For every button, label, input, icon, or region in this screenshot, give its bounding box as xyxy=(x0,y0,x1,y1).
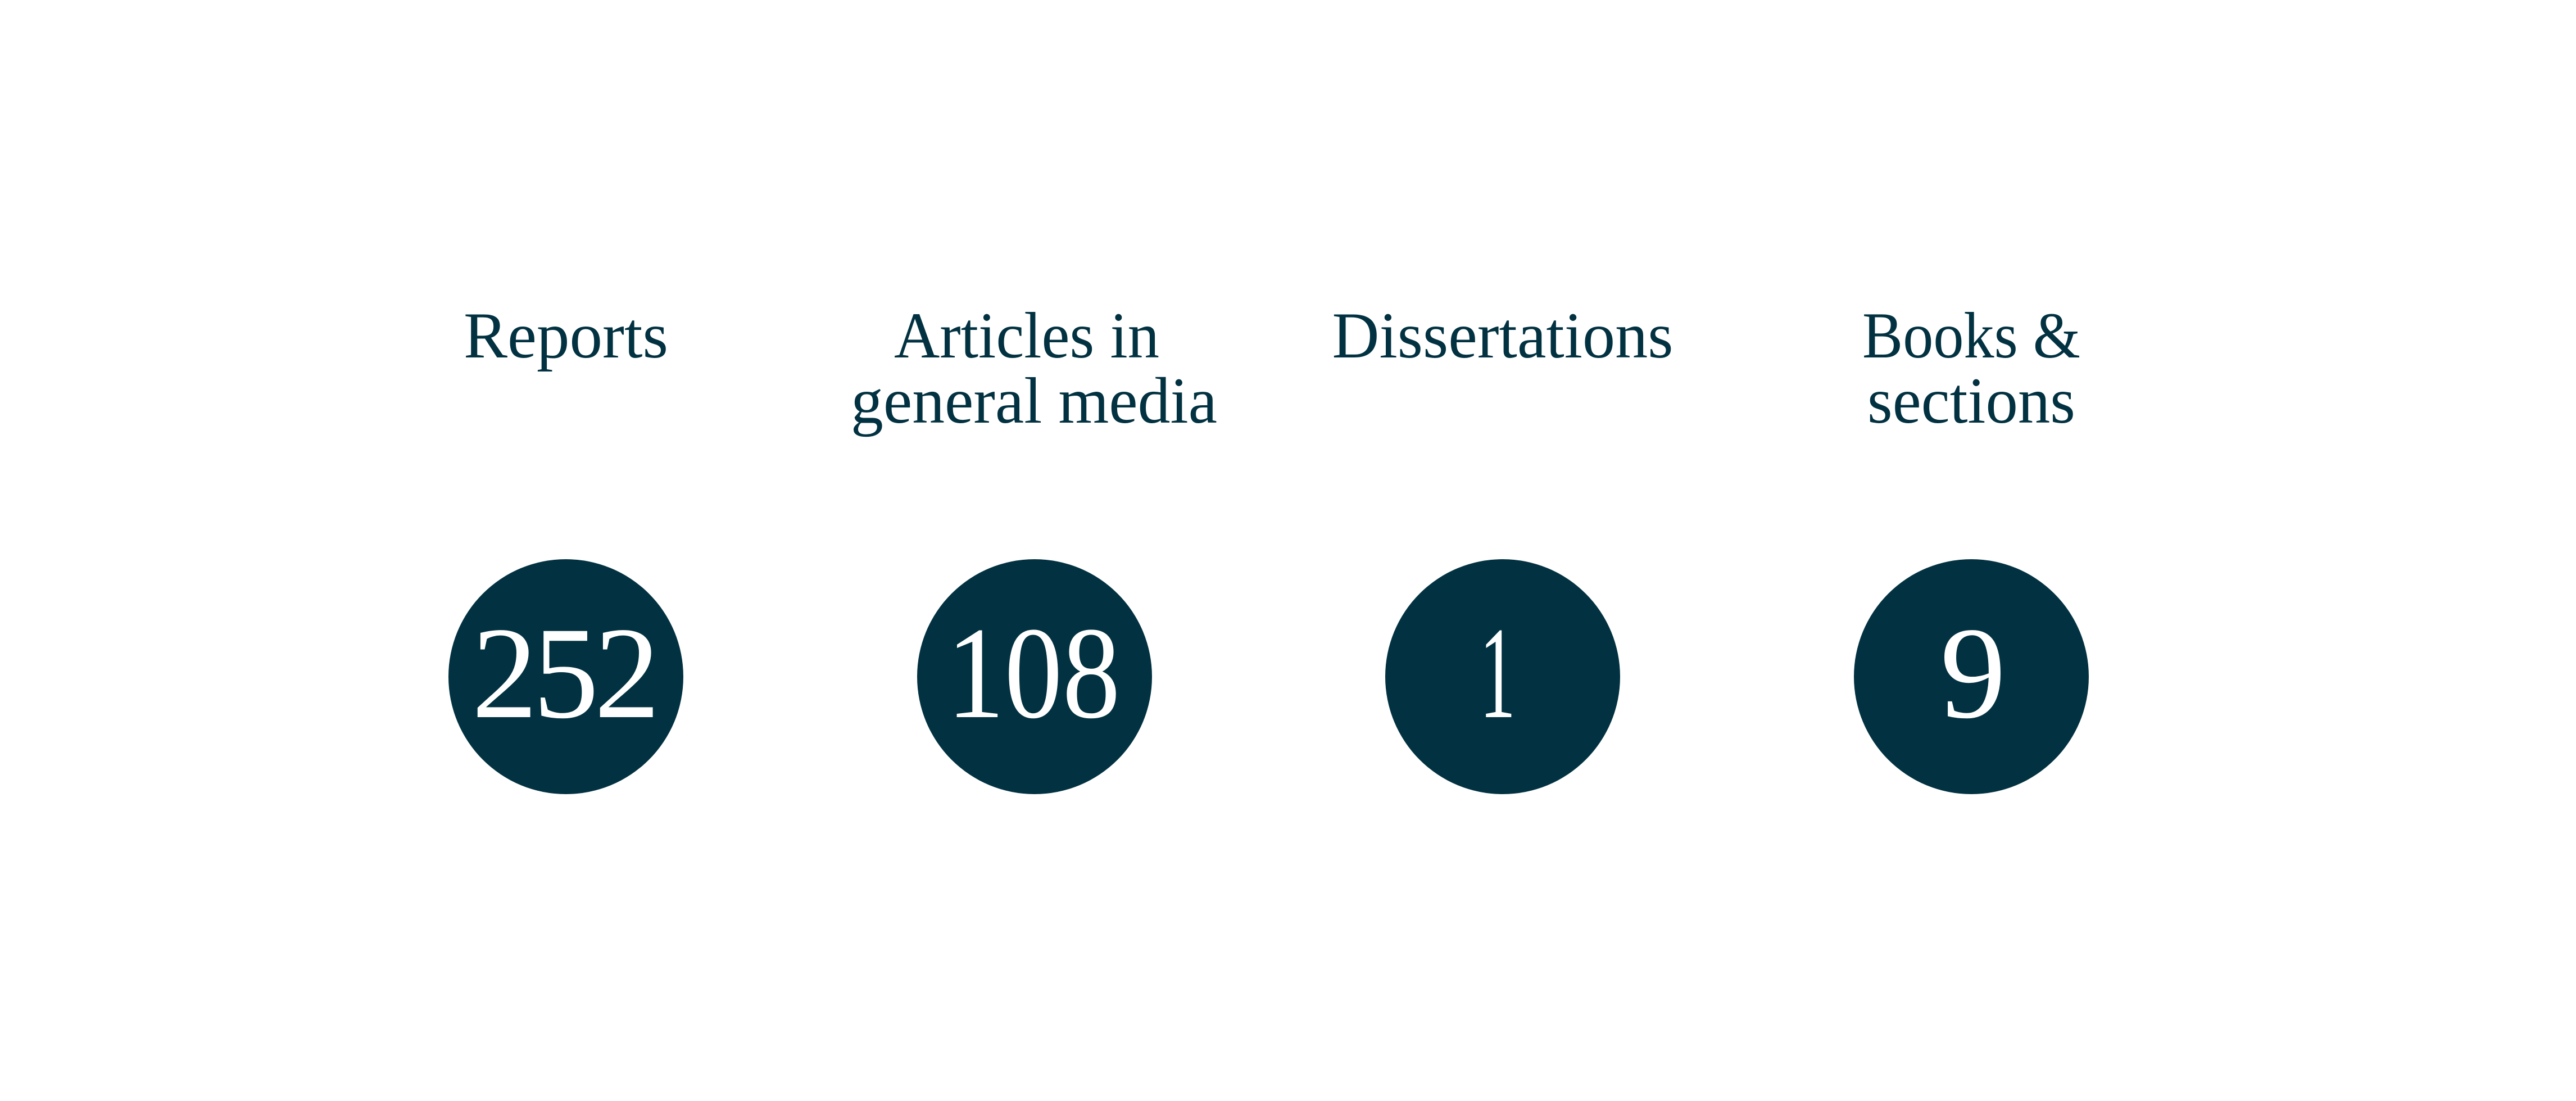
stat: books and sections xyxy=(1854,300,2089,794)
badge: 108 xyxy=(917,559,1152,794)
stat: articles in general media xyxy=(851,300,1217,794)
badge: 108: 108 xyxy=(946,600,1121,746)
label: articles in general media xyxy=(851,300,1217,437)
label: reports: Reports xyxy=(464,300,668,372)
badge: 9 xyxy=(1854,559,2089,794)
stat: dissertations xyxy=(1332,300,1674,794)
label: dissertations: Dissertations xyxy=(1332,300,1674,372)
badge: 252 xyxy=(448,559,683,794)
label: articles in general media: general media xyxy=(851,365,1217,437)
stat: reports xyxy=(448,300,683,794)
label: books and sections: sections xyxy=(1867,365,2075,437)
badge: 1: 1 xyxy=(1480,600,1516,746)
label: articles in general media: Articles in xyxy=(894,300,1159,372)
label: books and sections: Books & xyxy=(1862,300,2080,372)
label: books and sections xyxy=(1862,300,2080,437)
badge: 252: 252 xyxy=(472,600,655,746)
badge: 1 xyxy=(1385,559,1620,794)
badge: 9: 9 xyxy=(1940,600,2006,746)
